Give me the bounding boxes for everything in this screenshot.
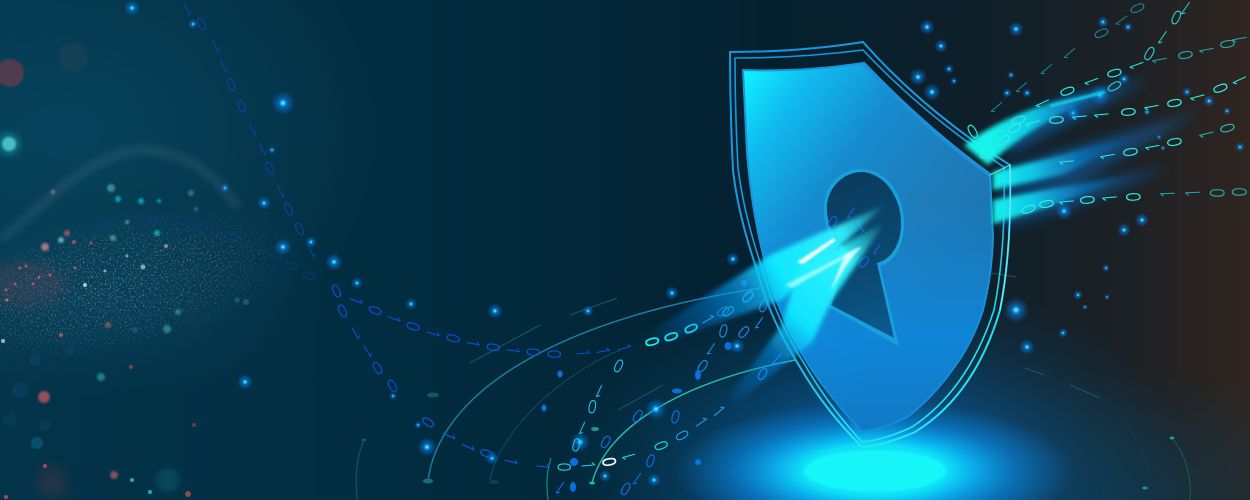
binary stream: right, third line: 0 — [976, 144, 998, 162]
binary stream: blue horizontal running into the keyhole: 0 — [523, 347, 541, 357]
binary stream: lower left arc: 0 — [671, 428, 691, 444]
binary stream: right, fourth line: 0 — [1164, 136, 1186, 148]
binary stream: blue horizontal running into the keyhole: 0 — [298, 267, 318, 283]
binary stream: rising cyan to blue: 0 — [586, 399, 598, 417]
binary stream: lower left arc: 1 — [438, 427, 458, 443]
binary stream: blue horizontal running into the keyhole: 0 — [717, 303, 737, 321]
binary stream: right, fourth line: 1 — [1057, 157, 1077, 167]
face bevel edge — [863, 63, 990, 175]
binary stream: right, second line: 0 — [1175, 49, 1197, 61]
binary stream: blue diagonal from top left: 1 — [215, 55, 231, 75]
binary stream: rising cyan to blue: 0 — [610, 357, 626, 377]
binary stream: blue diagonal from top left — [179, 0, 401, 397]
binary stream: right, third line: 0 — [1119, 106, 1139, 118]
binary stream: blue horizontal running into the keyhole: 0 — [402, 319, 422, 333]
binary stream: right, fourth line: 1 — [1142, 141, 1164, 153]
binary stream: blue horizontal running into the keyhole: 1 — [697, 312, 717, 328]
binary stream: right, second line: 1 — [1149, 54, 1171, 66]
binary stream: teal faded upper right: 1 — [986, 97, 1008, 117]
binary stream: right, fourth line: 1 — [1196, 127, 1218, 141]
binary stream: rising cyan to blue: 0 — [617, 480, 633, 500]
binary stream: rising cyan to blue: 1 — [769, 348, 787, 368]
binary stream: rising cyan to blue — [552, 287, 787, 500]
binary stream: blue horizontal running into the keyhole: 0 — [144, 215, 162, 225]
binary stream: rising cyan to blue: 0 — [569, 436, 583, 456]
binary stream: right, second line: 0 — [1217, 38, 1239, 50]
binary stream: right, second line: 0 — [1104, 77, 1126, 95]
binary stream: blue diagonal from top left: 0 — [262, 159, 278, 179]
binary stream: blue horizontal running into the keyhole: 0 — [641, 335, 661, 349]
keyhole — [824, 169, 904, 346]
binary stream: blue horizontal running into the keyhole: 1 — [613, 341, 633, 355]
binary stream: blue diagonal from top left: 0 — [335, 302, 351, 322]
binary stream: right, second line: 1 — [1126, 57, 1148, 73]
binary stream: blue diagonal from top left: 0 — [385, 377, 401, 397]
binary stream: teal faded upper right: 1 — [1011, 77, 1033, 97]
binary stream: blue horizontal running into the keyhole: 1 — [573, 348, 591, 358]
binary stream: right, third line — [976, 72, 1250, 162]
binary stream: lower left arc: 0 — [478, 447, 498, 461]
binary stream: rising cyan to blue: 0 — [693, 357, 711, 377]
floor glow under the shield — [675, 400, 1075, 500]
binary stream: teal faded upper right: 1 — [1111, 10, 1133, 30]
binary stream: blue diagonal from top left: 1 — [272, 180, 288, 200]
binary stream: lower left arc: 0 — [554, 462, 572, 472]
binary stream: blue diagonal from top left: 0 — [292, 220, 308, 240]
binary stream: rising cyan to blue: 1 — [592, 380, 608, 400]
binary stream: right, fourth line: 1 — [1097, 150, 1119, 162]
binary digits seen inside the keyhole — [824, 203, 886, 272]
binary stream: blue diagonal from top left: 0 — [224, 76, 240, 96]
binary stream: right, fifth line: 0 — [1018, 201, 1040, 217]
binary stream: blue horizontal running into the keyhole: 1 — [169, 217, 187, 229]
re-drawn shield rim in front of the beams — [990, 165, 1010, 310]
binary stream: blue horizontal running into the keyhole: 1 — [109, 216, 127, 226]
shield front face — [743, 63, 993, 431]
binary digits seen inside the keyhole: 1 — [870, 239, 886, 257]
binary stream: right, second line — [964, 0, 1250, 143]
binary stream: lower left arc: 1 — [578, 460, 596, 470]
binary stream: lower left arc: 1 — [708, 403, 728, 421]
binary stream: lower left arc: 1 — [533, 461, 551, 471]
binary stream: right, fifth line: 0 — [1124, 192, 1144, 202]
binary stream: right, fifth line: 1 — [1057, 197, 1077, 207]
binary stream: right, fifth line: 1 — [1183, 188, 1203, 198]
binary stream: blue diagonal from top left: 1 — [207, 35, 223, 55]
binary stream: blue diagonal from top left: 1 — [244, 118, 260, 138]
binary stream: right, second line: 0 — [964, 121, 982, 143]
binary stream: right, fifth line: 0 — [1036, 198, 1058, 210]
binary stream: blue horizontal running into the keyhole: 1 — [463, 337, 481, 349]
binary stream: right, second line: 1 — [1153, 26, 1173, 48]
binary stream: rising cyan to blue: 0 — [712, 304, 732, 320]
shield outer rim lines — [730, 42, 1010, 447]
binary stream: right, fifth line: 0 — [1078, 194, 1098, 206]
binary stream: blue horizontal running into the keyhole: 0 — [737, 289, 757, 307]
binary stream: teal faded upper right — [986, 0, 1149, 117]
binary stream: rising cyan to blue: 0 — [738, 287, 756, 307]
binary stream: right, fifth line: 0 — [1230, 187, 1250, 197]
binary stream: right, second line: 0 — [1140, 43, 1158, 65]
binary stream: teal faded upper right: 1 — [1059, 43, 1081, 63]
binary stream: rising cyan to blue: 1 — [703, 338, 721, 358]
binary stream: blue horizontal running into the keyhole: 1 — [202, 223, 222, 237]
binary stream: blue horizontal running into the keyhole: 0 — [660, 330, 680, 344]
binary stream: rising cyan to blue: 1 — [751, 312, 769, 332]
binary stream: blue horizontal running into the keyhole: 0 — [225, 231, 245, 245]
binary stream: blue diagonal from top left: 1 — [303, 240, 319, 260]
binary stream: right, fifth line: 0 — [1208, 188, 1228, 198]
binary stream: blue horizontal running into the keyhole: 0 — [280, 257, 300, 273]
binary stream: blue horizontal running into the keyhole: 0 — [483, 341, 501, 353]
binary stream: lower left arc: 1 — [690, 414, 710, 432]
binary stream: blue horizontal running into the keyhole: 1 — [266, 248, 286, 264]
binary stream: blue diagonal from top left: 0 — [281, 200, 297, 220]
binary stream: rising cyan to blue: 0 — [734, 323, 752, 343]
binary stream: right, third line: 1 — [1070, 112, 1090, 122]
binary stream: blue horizontal running into the keyhole: 1 — [345, 293, 365, 307]
binary digits seen inside the keyhole: 1 — [844, 203, 860, 221]
binary digits seen inside the keyhole: 1 — [852, 216, 868, 234]
binary stream: right, fourth line: 0 — [1217, 121, 1239, 135]
binary stream: right, fifth line: 1 — [1158, 189, 1178, 199]
binary stream: rising cyan to blue: 0 — [668, 408, 682, 428]
binary stream: rising cyan to blue: 1 — [629, 468, 647, 488]
cyan ellipse pad under the shield — [804, 450, 946, 492]
binary stream: right, second line: 0 — [1008, 112, 1030, 128]
binary stream: lower left arc: 0 — [650, 439, 670, 453]
binary stream: right, third line: 0 — [1164, 97, 1186, 109]
binary stream: blue diagonal from top left: 0 — [370, 359, 386, 379]
binary stream: right, third line: 0 — [993, 130, 1015, 150]
shield with keyhole — [730, 42, 1010, 447]
binary stream: rising cyan to blue: 0 — [597, 433, 613, 453]
binary stream: right, second line: 0 — [1104, 66, 1126, 80]
binary stream: blue horizontal running into the keyhole: 0 — [544, 349, 562, 359]
binary stream: blue horizontal running into the keyhole: 0 — [93, 220, 111, 230]
binary stream: rising cyan to blue: 0 — [643, 452, 657, 472]
binary stream: right, third line: 0 — [1210, 80, 1232, 96]
binary stream: rising cyan to blue: 1 — [575, 417, 591, 437]
binary stream: right, second line: 0 — [1057, 83, 1079, 99]
bokeh circles — [0, 42, 249, 499]
binary stream: rising cyan to blue: 0 — [754, 365, 770, 385]
binary stream: blue diagonal from top left: 1 — [254, 138, 270, 158]
binary stream: rising cyan to blue: 0 — [716, 322, 730, 342]
binary stream: right, third line: 1 — [1092, 110, 1112, 120]
binary stream: rising cyan to blue: 0 — [756, 297, 770, 317]
binary stream: lower left arc: 1 — [620, 449, 640, 463]
small blue droplets among the digits — [542, 280, 747, 492]
binary stream: right, third line: 0 — [1047, 114, 1067, 126]
binary stream: blue horizontal running into the keyhole: 0 — [364, 303, 384, 317]
binary stream: lower left arc: 1 — [500, 454, 520, 468]
binary stream: rising cyan to blue: 1 — [552, 477, 570, 497]
binary stream: blue diagonal from top left: 1 — [359, 340, 375, 360]
binary stream: blue horizontal running into the keyhole: 1 — [245, 241, 265, 257]
binary stream: lower left arc — [419, 403, 728, 472]
binary stream: right, fourth line — [1057, 121, 1239, 167]
binary stream: blue horizontal running into the keyhole — [93, 215, 757, 359]
binary digits seen inside the keyhole: 0 — [854, 254, 872, 272]
binary stream: lower left arc: 0 — [599, 456, 617, 468]
binary stream: rising cyan to blue: 0 — [628, 407, 646, 427]
binary stream: right, second line: 1 — [1032, 95, 1054, 111]
binary stream: blue horizontal running into the keyhole: 1 — [503, 344, 521, 356]
binary stream: blue horizontal running into the keyhole: 0 — [442, 331, 462, 345]
binary stream: blue horizontal running into the keyhole: 0 — [680, 321, 700, 337]
binary stream: lower left arc: 1 — [457, 438, 477, 454]
binary stream: blue diagonal from top left: 0 — [329, 282, 345, 302]
binary stream: blue diagonal from top left: 0 — [194, 15, 210, 35]
binary stream: right, third line: 1 — [1187, 90, 1209, 104]
thin orbit arcs — [356, 272, 1190, 500]
binary stream: right, second line: 0 — [1167, 7, 1185, 29]
particle nebula wave on the left — [0, 42, 320, 499]
light beams leaving the right of the shield — [964, 78, 1200, 228]
binary stream: lower left arc: 0 — [419, 414, 439, 432]
binary stream: blue horizontal running into the keyhole: 1 — [422, 326, 442, 340]
binary stream: right, fourth line: 0 — [1120, 146, 1142, 158]
binary stream: right, fifth line: 1 — [1100, 193, 1120, 203]
binary stream: right, second line: 1 — [1196, 44, 1218, 56]
binary digits seen inside the keyhole: 0 — [824, 214, 840, 232]
binary stream: right, third line: 1 — [1022, 116, 1044, 130]
binary stream: right, fifth line — [1018, 187, 1250, 217]
binary stream: blue horizontal running into the keyhole: 1 — [593, 345, 611, 357]
binary stream: teal faded upper right: 0 — [1091, 24, 1113, 42]
binary stream: blue diagonal from top left: 0 — [234, 97, 250, 117]
binary stream: blue horizontal running into the keyhole: 1 — [383, 311, 403, 325]
binary stream: right, third line: 1 — [1141, 101, 1163, 113]
binary stream: blue horizontal running into the keyhole: 0 — [186, 220, 204, 232]
binary stream: blue diagonal from top left: 1 — [347, 322, 363, 342]
light beams through the keyhole — [640, 205, 885, 404]
binary stream: teal faded upper right: 1 — [1036, 59, 1058, 79]
binary stream: right, second line: 1 — [1081, 73, 1103, 89]
binary stream: right, third line: 0 — [1004, 119, 1026, 137]
